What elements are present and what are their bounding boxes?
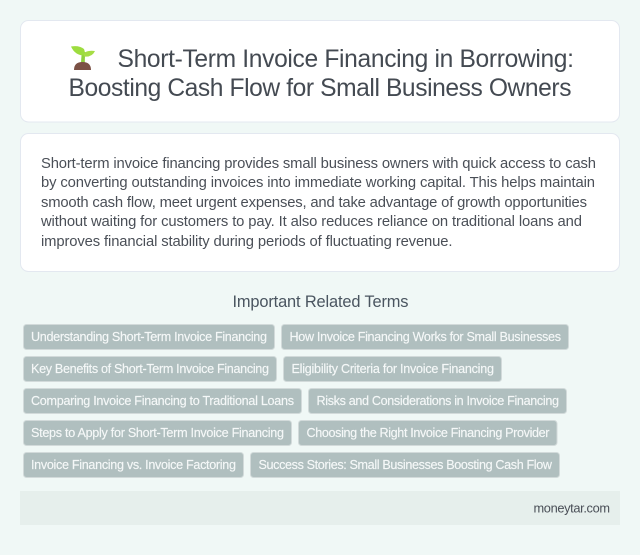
tag: How Invoice Financing Works for Small Businesses (290, 330, 561, 344)
tags: related terms (24, 324, 568, 478)
panel: description: improves financial stability during periods of fluctuating revenue. (41, 234, 452, 250)
tag (282, 324, 568, 350)
tag (24, 452, 244, 478)
panel: header (20, 20, 620, 122)
panel: description: Short-term invoice financing provides small business owners with quick access to cash (41, 156, 596, 172)
tag: Eligibility Criteria for Invoice Financing (292, 362, 494, 376)
tag: Key Benefits of Short-Term Invoice Financing (31, 362, 269, 376)
heading: related terms: Important Related Terms (232, 293, 408, 311)
tag: Success Stories: Small Businesses Boosting Cash Flow (258, 458, 553, 472)
tag: Invoice Financing vs. Invoice Factoring (31, 458, 236, 472)
tag: Choosing the Right Invoice Financing Provider (306, 426, 550, 440)
title (68, 46, 574, 102)
tag: Steps to Apply for Short-Term Invoice Financing (31, 426, 284, 440)
tag (298, 420, 557, 446)
tag: Risks and Considerations in Invoice Financing (316, 394, 559, 408)
tag (250, 452, 560, 478)
tag: Understanding Short-Term Invoice Financing (31, 330, 267, 344)
panel: description: smooth cash flow, meet urgent expenses, and take advantage of growth opportunities (41, 195, 587, 211)
tag (24, 324, 274, 350)
panel: description: by converting outstanding invoices into immediate working capital. This helps maintain (41, 175, 595, 191)
icon: seedling (71, 46, 95, 70)
tag (24, 356, 276, 382)
footer (20, 491, 620, 525)
tag (284, 356, 502, 382)
panel: description (20, 134, 620, 272)
tag (24, 420, 292, 446)
title: Short-Term Invoice Financing in Borrowing: (118, 46, 574, 73)
title: Boosting Cash Flow for Small Business Owners (68, 75, 572, 102)
tag (24, 388, 302, 414)
footer: moneytar.com (534, 500, 610, 516)
tag: Comparing Invoice Financing to Traditional Loans (31, 394, 294, 408)
panel: description: without waiting for customers to pay. It also reduces reliance on traditional loans and (40, 214, 582, 230)
tag (308, 388, 566, 414)
